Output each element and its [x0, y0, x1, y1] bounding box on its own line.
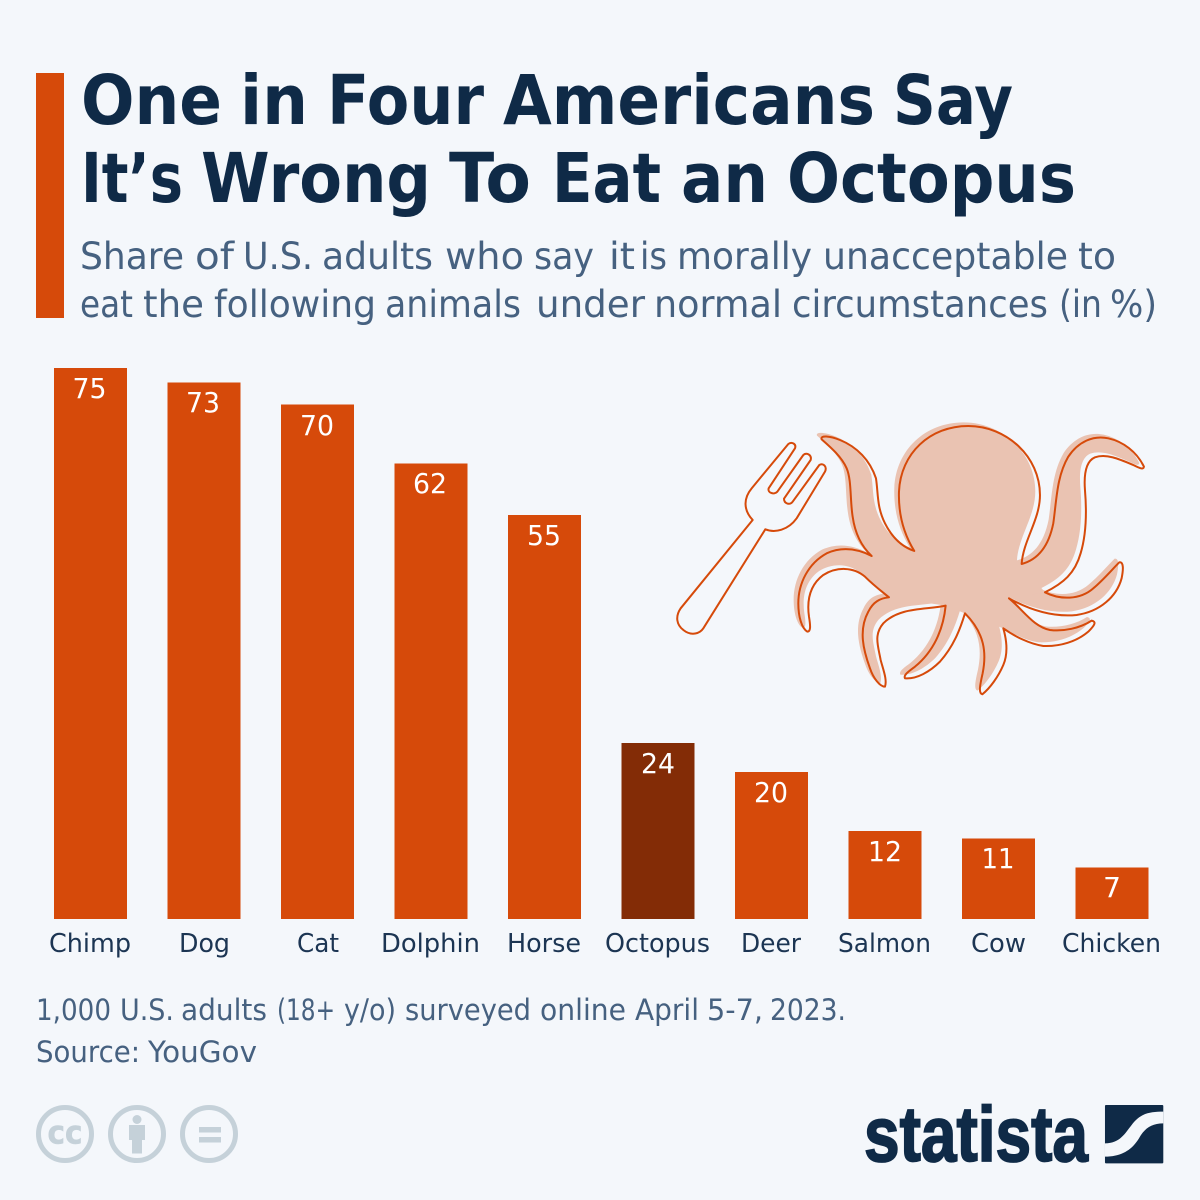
subtitle: the	[143, 283, 204, 326]
bar: Octopus 24 (highlighted): Octopus	[605, 929, 710, 959]
bar: Dog 73	[168, 382, 240, 959]
subtitle: morally	[677, 235, 812, 278]
bar: Octopus 24 (highlighted): 24	[641, 747, 675, 780]
bar: Cat 70: 70	[300, 409, 334, 442]
subtitle: it	[609, 235, 635, 278]
footnote and source: online	[540, 993, 626, 1027]
title: an	[681, 139, 768, 219]
bar: Chicken 7	[1062, 868, 1161, 959]
subtitle: to	[1078, 235, 1116, 278]
subtitle: following	[214, 283, 376, 326]
footnote and source: surveyed	[405, 993, 531, 1027]
bar: Dog 73: Dog	[179, 929, 230, 959]
title: It’s	[81, 139, 183, 219]
subtitle: U.S.	[243, 235, 313, 278]
bar: Deer 20: 20	[754, 776, 788, 809]
logo wordmark: statista	[864, 1090, 1088, 1178]
footnote and source: 1,000	[36, 993, 111, 1027]
footnote and source: y/o)	[344, 993, 396, 1027]
bar: Chimp 75: 75	[72, 372, 106, 405]
subtitle: Share	[80, 235, 184, 278]
bar: Salmon 12	[838, 831, 931, 959]
bar: Cow 11: 11	[982, 842, 1014, 875]
title: Octopus	[787, 139, 1076, 219]
bar: Dolphin 62	[381, 464, 480, 959]
bar: Chicken 7: 7	[1103, 871, 1121, 904]
bar: Cow 11	[962, 838, 1035, 959]
title: Say	[893, 61, 1013, 141]
subtitle: eat	[80, 283, 133, 326]
subtitle: animals	[385, 283, 521, 326]
subtitle: is	[640, 235, 667, 278]
title: One	[81, 61, 222, 141]
title: To	[449, 139, 531, 219]
bar: Dolphin 62: 62	[413, 467, 447, 500]
bar: Dog 73: 73	[186, 386, 220, 419]
bar: Horse 55: Horse	[507, 929, 581, 959]
footnote and source: 5-7,	[707, 993, 763, 1027]
bar: Cat 70	[281, 404, 354, 959]
icon: octopus	[794, 422, 1144, 694]
title: Four	[327, 61, 484, 141]
icon: fork	[677, 443, 826, 634]
bar: Octopus 24 (highlighted)	[605, 743, 710, 959]
subtitle: unacceptable	[823, 235, 1068, 278]
bar: Chicken 7: Chicken	[1062, 929, 1161, 959]
subtitle: adults	[322, 235, 433, 278]
subtitle: who	[445, 235, 524, 278]
subtitle: say	[534, 235, 594, 278]
accent bar	[36, 73, 64, 318]
subtitle: circumstances	[792, 283, 1048, 326]
icon: creative commons: cc	[48, 1114, 82, 1152]
footnote and source: U.S.	[120, 993, 174, 1027]
bar: Cow 11: Cow	[971, 929, 1026, 959]
bar: Chimp 75	[49, 368, 131, 959]
subtitle	[80, 235, 1157, 326]
footnote and source: adults	[181, 993, 267, 1027]
logo mark	[1105, 1105, 1163, 1163]
subtitle: %)	[1110, 283, 1157, 326]
statista logo	[864, 1090, 1163, 1178]
footnote and source: Source:	[36, 1035, 140, 1069]
footnote and source: 2023.	[770, 993, 846, 1027]
bar: Deer 20: Deer	[741, 929, 801, 959]
subtitle: of	[195, 235, 235, 278]
icon: no derivatives	[182, 1108, 236, 1160]
footnote and source: (18+	[277, 993, 335, 1027]
title: Wrong	[201, 139, 431, 219]
footnote and source	[36, 993, 846, 1069]
subtitle: (in	[1059, 283, 1102, 326]
bar: Deer 20	[735, 772, 808, 959]
bar chart	[49, 368, 1161, 959]
bar: Salmon 12: 12	[868, 835, 902, 868]
title: Eat	[552, 139, 661, 219]
title: Americans	[503, 61, 875, 141]
bar: Horse 55	[507, 515, 581, 959]
bar: Cat 70: Cat	[297, 929, 339, 959]
license icons	[38, 1108, 236, 1160]
bar: Salmon 12: Salmon	[838, 929, 931, 959]
footnote and source: April	[635, 993, 699, 1027]
icon: creative commons	[38, 1108, 92, 1160]
icon: attribution person	[110, 1108, 164, 1160]
subtitle: under	[536, 283, 646, 326]
bar: Chimp 75: Chimp	[49, 929, 131, 959]
title: in	[240, 61, 308, 141]
bar: Dolphin 62: Dolphin	[381, 929, 480, 959]
footnote and source: YouGov	[147, 1035, 257, 1069]
subtitle: normal	[654, 283, 782, 326]
bar: Horse 55: 55	[527, 519, 561, 552]
title	[81, 61, 1076, 219]
